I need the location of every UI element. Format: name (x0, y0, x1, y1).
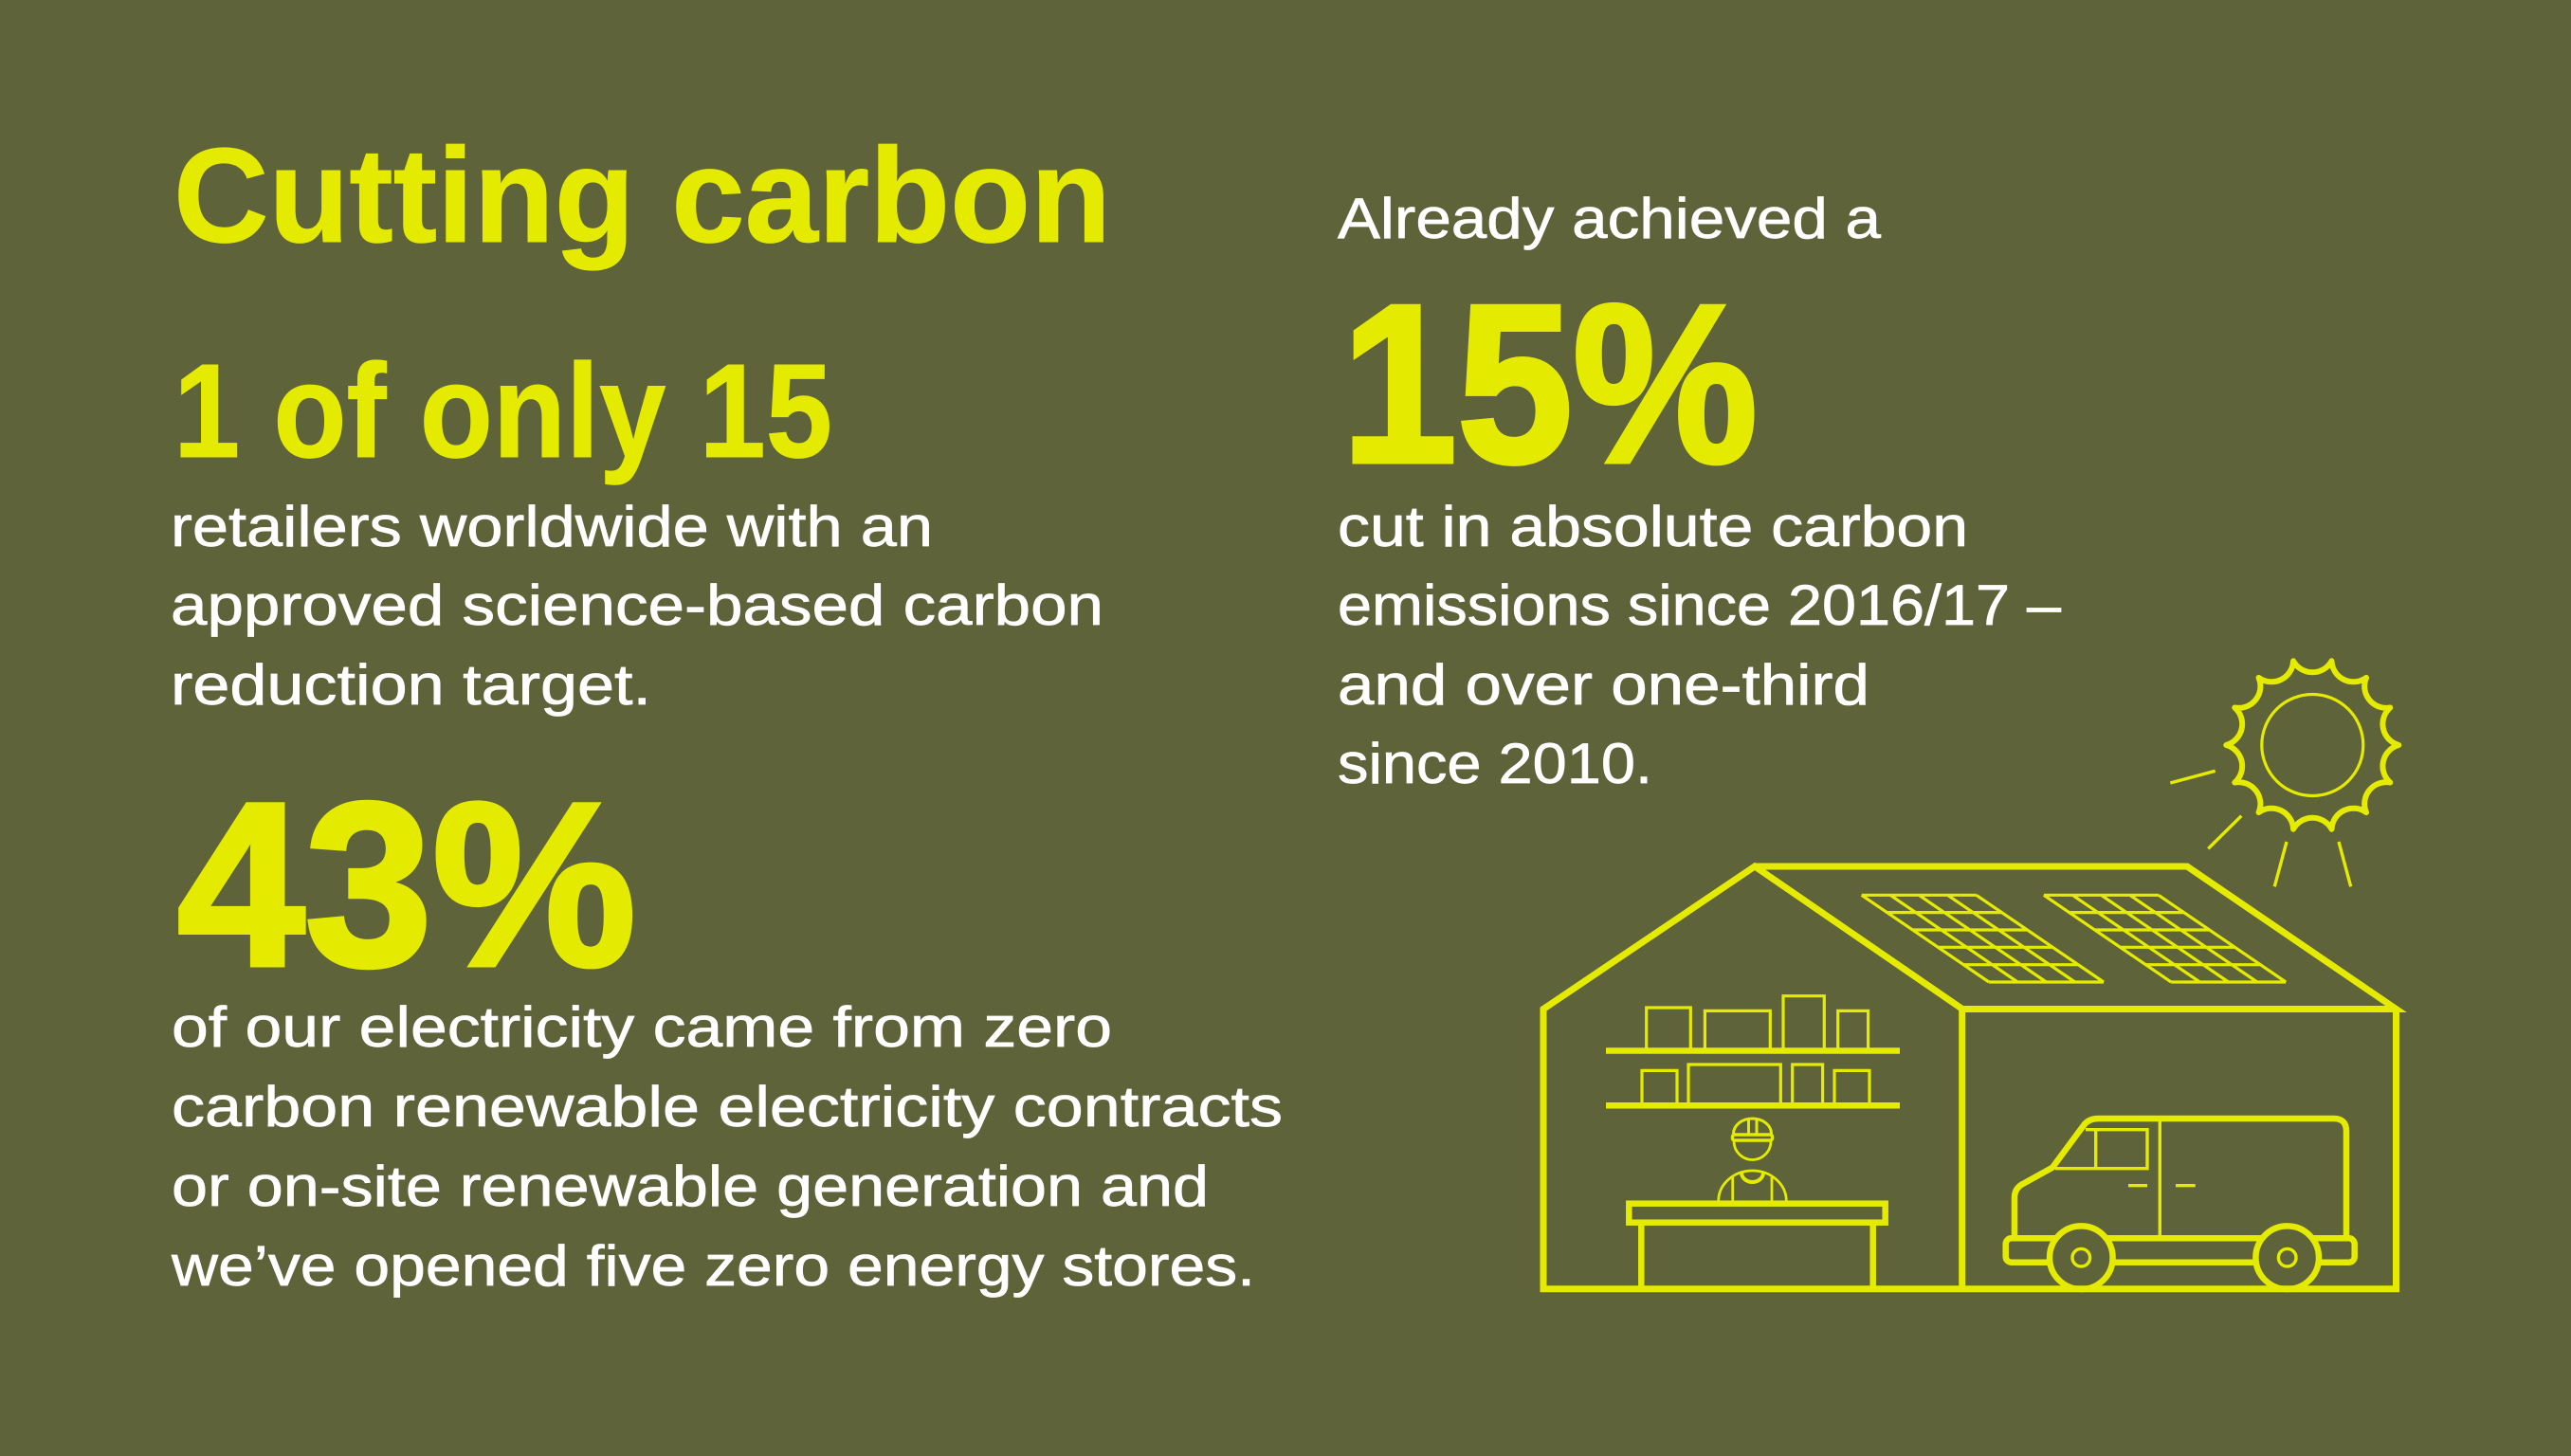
description: science-based target: retailers worldwide with an (171, 495, 933, 558)
worker (1719, 1119, 1786, 1201)
title: Cutting carbon (173, 120, 1111, 271)
description: absolute carbon emissions: cut in absolute carbon (1338, 495, 1968, 558)
description: absolute carbon emissions (1338, 495, 2062, 795)
stat heading: 1 of only 15: 1 of only 15 (173, 336, 832, 485)
description: absolute carbon emissions: since 2010. (1338, 732, 1652, 795)
building outline (1543, 866, 2397, 1289)
description: science-based target: reduction target. (171, 653, 651, 717)
counter (1629, 1204, 1886, 1289)
van (2006, 1119, 2355, 1289)
description: renewable electricity (171, 995, 1283, 1298)
sun disc (2262, 694, 2363, 796)
description: renewable electricity: we’ve opened five zero energy stores. (171, 1234, 1255, 1298)
description: absolute carbon emissions: and over one-third (1338, 653, 1869, 717)
stat: 15%: 15% (1341, 259, 1758, 510)
description: renewable electricity: or on-site renewable generation and (172, 1155, 1209, 1218)
solar panel right (2044, 895, 2286, 982)
sun outline (2226, 661, 2398, 829)
description: renewable electricity: of our electricity came from zero (172, 995, 1112, 1059)
illustration: store building (1543, 866, 2397, 1289)
text block: 43% electricity (171, 755, 1283, 1298)
text block: 15% cut (1338, 187, 2062, 795)
stat: 43%: 43% (177, 755, 636, 1015)
description: absolute carbon emissions: emissions since 2016/17 – (1338, 573, 2062, 637)
intro: already achieved: Already achieved a (1338, 187, 1882, 250)
description: science-based target: approved science-based carbon (171, 573, 1103, 637)
solar panel left (1862, 895, 2104, 982)
shelves with boxes (1606, 996, 1900, 1105)
sun rays (2170, 771, 2351, 886)
description: science-based target (171, 495, 1103, 717)
description: renewable electricity: carbon renewable electricity contracts (172, 1075, 1283, 1138)
icon: sun (2170, 661, 2398, 886)
text block: 1 of only 15 retailers (171, 336, 1103, 717)
